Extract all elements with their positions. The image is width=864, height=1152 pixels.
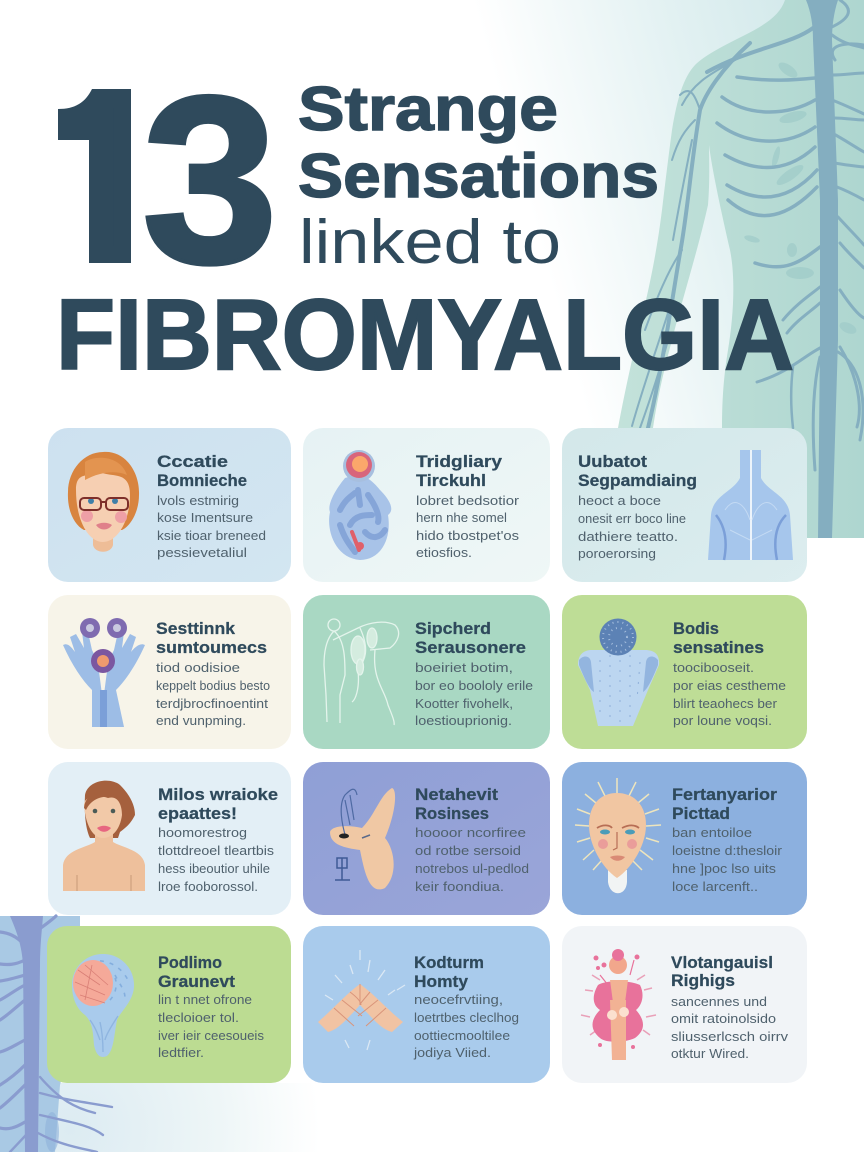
card 8 body text: hoooor ncorfiree (415, 825, 526, 840)
icon: white line body figure (324, 619, 399, 725)
icon: textured torso and head (578, 618, 659, 726)
card 8 heading: Rosinses (415, 804, 489, 823)
card 12 body text: sliusserlcsch oirrv (671, 1029, 789, 1044)
heading line: FIBROMYALGIA: FIBROMYALGIA (56, 279, 794, 391)
card 11 heading: Homty (414, 972, 469, 991)
card 5 heading: Sipcherd (415, 619, 491, 638)
icon: nose and ear anatomy (330, 788, 395, 889)
card 8 body text: notrebos ul-pedlod (415, 861, 529, 876)
card 5 heading: Serausonere (415, 638, 526, 657)
panel: card 1 (48, 428, 291, 582)
card 7 heading (158, 785, 278, 823)
card 2 heading (416, 452, 503, 490)
card 9 body text: ban entoiloe (672, 825, 752, 840)
card 9 body text: loeistne d:thesloir (672, 843, 783, 858)
panel: card 10 (47, 926, 291, 1083)
card 7 heading: epaattes! (158, 804, 237, 823)
card 3 heading (578, 452, 697, 490)
card 7 body text: hoomorestrog (158, 825, 247, 840)
card 10 body text (158, 992, 265, 1060)
icon: organ with sphere (329, 450, 391, 560)
panel: card 8 (303, 762, 550, 915)
card 11 body text (413, 992, 519, 1060)
card 12 heading: Righigs (671, 971, 735, 990)
card 10 body text: iver ieir ceesoueis (158, 1028, 265, 1043)
nervous system body illustration (618, 0, 864, 538)
card 11 body text: jodiya Viied. (413, 1045, 491, 1060)
card 5 body text: Kootter fivohelk, (415, 696, 513, 711)
big number 3: 3 (142, 48, 278, 313)
card 3 body text: dathiere teatto. (578, 529, 678, 544)
card 12 heading: Vlotangauisl (671, 953, 773, 972)
card 6 heading: sensatines (673, 638, 764, 657)
icon: back with spine (708, 450, 793, 560)
panel: card 9 (562, 762, 807, 915)
panel: card 5 (303, 595, 550, 749)
card 7 heading: Milos wraioke (158, 785, 278, 804)
card 8 body text: od rotbe sersoid (415, 843, 521, 858)
card 3 body text (578, 493, 686, 561)
panel: card 6 (562, 595, 807, 749)
icon: woman portrait (63, 781, 145, 891)
card 10 body text: lin t nnet ofrone (158, 992, 252, 1007)
card 8 body text: keir foondiua. (415, 879, 504, 894)
card 5 body text (415, 660, 533, 728)
card 2 body text: etiosfios. (416, 545, 472, 560)
big number 1: 1 (38, 37, 177, 316)
card 12 body text: omit ratoinolsido (671, 1011, 776, 1026)
card 6 body text: por loune voqsi. (673, 713, 772, 728)
icon: hands with eyes (63, 618, 145, 727)
card 2 heading: Tridgliary (416, 452, 503, 471)
card 4 body text: keppelt bodius besto (156, 678, 270, 693)
card 10 body text: ledtfier. (158, 1045, 204, 1060)
card 1 body text: ksie tioar breneed (157, 528, 266, 543)
icon: woman with glasses (68, 452, 139, 552)
card 7 body text (158, 825, 275, 894)
card 12 heading (671, 953, 773, 990)
card 2 body text (416, 493, 520, 560)
card 7 body text: hess ibeoutior uhile (158, 861, 270, 876)
card 4 body text: end vunpming. (156, 713, 246, 728)
card 6 body text: blirt teaohecs ber (673, 696, 778, 711)
card 9 body text: loce larcenft.. (672, 879, 758, 894)
card 2 body text: hern nhe somel (416, 510, 507, 525)
heading line: Strange: Strange (298, 75, 558, 144)
card 4 body text: tiod oodisioe (156, 660, 240, 675)
card 9 heading: Fertanyarior (672, 785, 777, 804)
card 9 body text: hne ]poc lso uits (672, 861, 777, 876)
card 3 body text: heoct a boce (578, 493, 661, 508)
card 11 body text: oottiecmooltilee (414, 1028, 510, 1043)
card 6 body text: toocibooseit. (673, 660, 754, 675)
icon: brain in blue bulb (72, 954, 134, 1057)
card 6 body text: por eias cestheme (673, 678, 786, 693)
card 1 heading (157, 452, 247, 490)
card 11 body text: neocefrvtiing, (414, 992, 503, 1007)
icon: pink figure with burst (581, 949, 656, 1060)
card 11 heading (414, 953, 484, 991)
card 12 body text: sancennes und (671, 994, 767, 1009)
card 7 body text: tlottdreoel tleartbis (158, 843, 275, 858)
card 1 body text: lvols estmirig (157, 493, 239, 508)
card 8 heading: Netahevit (415, 785, 498, 804)
card 1 body text (157, 493, 266, 560)
bottom left background wash (0, 1083, 320, 1152)
card 8 body text (415, 825, 529, 894)
panel: card 7 (48, 762, 291, 915)
card 12 body text: otktur Wired. (671, 1046, 749, 1061)
card 6 heading: Bodis (673, 619, 719, 638)
heading line: linked to: linked to (299, 208, 561, 277)
card 6 heading (673, 619, 764, 657)
card 9 heading: Picttad (672, 804, 730, 823)
card 1 heading: Cccatie (157, 452, 228, 471)
panel: card 12 (562, 926, 807, 1083)
icon: tingling fingertips (318, 950, 405, 1050)
title (58, 86, 793, 371)
card 9 heading (672, 785, 777, 823)
card 5 body text: loestiouprionig. (415, 713, 512, 728)
panel: card 3 (562, 428, 807, 582)
card 1 heading: Bomnieche (157, 471, 247, 490)
card 4 heading: Sesttinnk (156, 619, 236, 638)
card 1 body text: kose Imentsure (157, 510, 253, 525)
card 3 body text: poroerorsing (578, 546, 656, 561)
card 4 body text: terdjbrocfinoentint (156, 696, 268, 711)
card 11 heading: Kodturm (414, 953, 484, 972)
card 5 heading (415, 619, 526, 657)
card 2 heading: Tirckuhl (416, 471, 486, 490)
top right background wash (440, 0, 864, 428)
card 5 body text: boeiriet botim, (415, 660, 513, 675)
card 5 body text: bor eo boololy erile (415, 678, 533, 693)
card 7 body text: lroe fooborossol. (158, 879, 258, 894)
card 8 heading (415, 785, 498, 823)
card 9 body text (672, 825, 783, 894)
card 4 body text (156, 660, 270, 728)
card 2 body text: lobret bedsotior (416, 493, 520, 508)
card 3 body text: onesit err boco line (578, 511, 686, 526)
lower left nerve illustration (0, 916, 112, 1152)
panel: card 2 (303, 428, 550, 582)
card 3 heading: Uubatot (578, 452, 647, 471)
card 10 heading (158, 953, 235, 991)
card 3 heading: Segpamdiaing (578, 471, 697, 490)
card 11 body text: loetrtbes cleclhog (414, 1010, 519, 1025)
heading line: Sensations: Sensations (298, 142, 659, 211)
panel: card 4 (48, 595, 291, 749)
card 10 heading: Podlimo (158, 953, 222, 972)
panel: card 11 (303, 926, 550, 1083)
card 2 body text: hido tbostpet'os (416, 528, 520, 543)
card 4 heading (156, 619, 267, 657)
icon: bald head with rays (575, 778, 661, 893)
card 1 body text: pessievetaliul (157, 545, 247, 560)
card 10 heading: Graunevt (158, 972, 235, 991)
card 10 body text: tlecloioer tol. (158, 1010, 239, 1025)
card 4 heading: sumtoumecs (156, 638, 267, 657)
card 12 body text (671, 994, 789, 1061)
card 6 body text (673, 660, 786, 728)
